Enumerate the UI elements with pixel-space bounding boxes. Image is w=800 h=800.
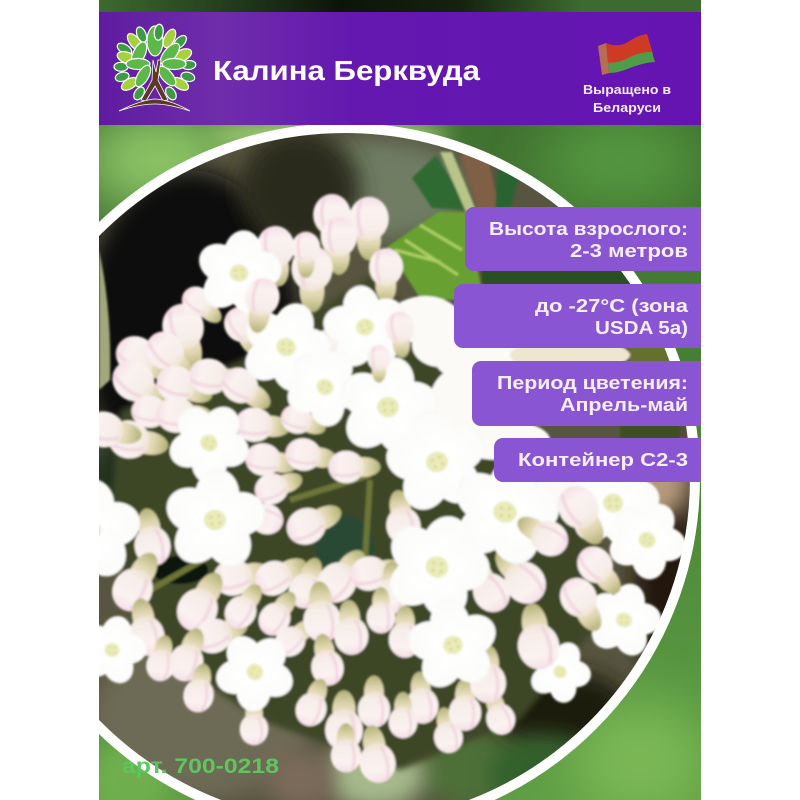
buds: front layer (239, 276, 631, 673)
infographic canvas (99, 0, 701, 800)
photo: dark background inside the circle (99, 133, 690, 800)
article number: арт. 700-0218 (122, 755, 279, 778)
white circular frame (99, 125, 700, 800)
product title: Калина Берквуда (213, 55, 480, 86)
panel: flowering period (472, 361, 701, 426)
photo: blurred green background outside the circle (80, 0, 710, 800)
photo: viburnum flower cluster (99, 150, 685, 784)
header band (99, 12, 701, 125)
open flowers (99, 228, 685, 713)
panel: flowering period: Апрель-май (560, 395, 688, 415)
panel: mature height: 2-3 метров (570, 241, 688, 261)
made in Belarus caption: Выращено в (583, 82, 671, 97)
panel: mature height (465, 207, 701, 271)
icon: Belarus flag (598, 34, 655, 75)
panel: container size (494, 438, 701, 482)
greenery under the cluster (110, 270, 610, 770)
leaves and stem behind the cluster (99, 150, 702, 440)
panel: container size: Контейнер С2-3 (518, 450, 688, 470)
white petals behind the panels (398, 294, 632, 504)
logo: tree (114, 24, 196, 111)
buds: rear layer (81, 194, 554, 786)
panel: hardiness: до -27°C (зона (535, 296, 689, 316)
header band: Беларуси (593, 100, 661, 115)
panel: flowering period: Период цветения: (497, 373, 688, 393)
panel: hardiness (454, 284, 701, 348)
panel: mature height: Высота взрослого: (489, 219, 688, 239)
panel: hardiness: USDA 5a) (595, 318, 688, 338)
